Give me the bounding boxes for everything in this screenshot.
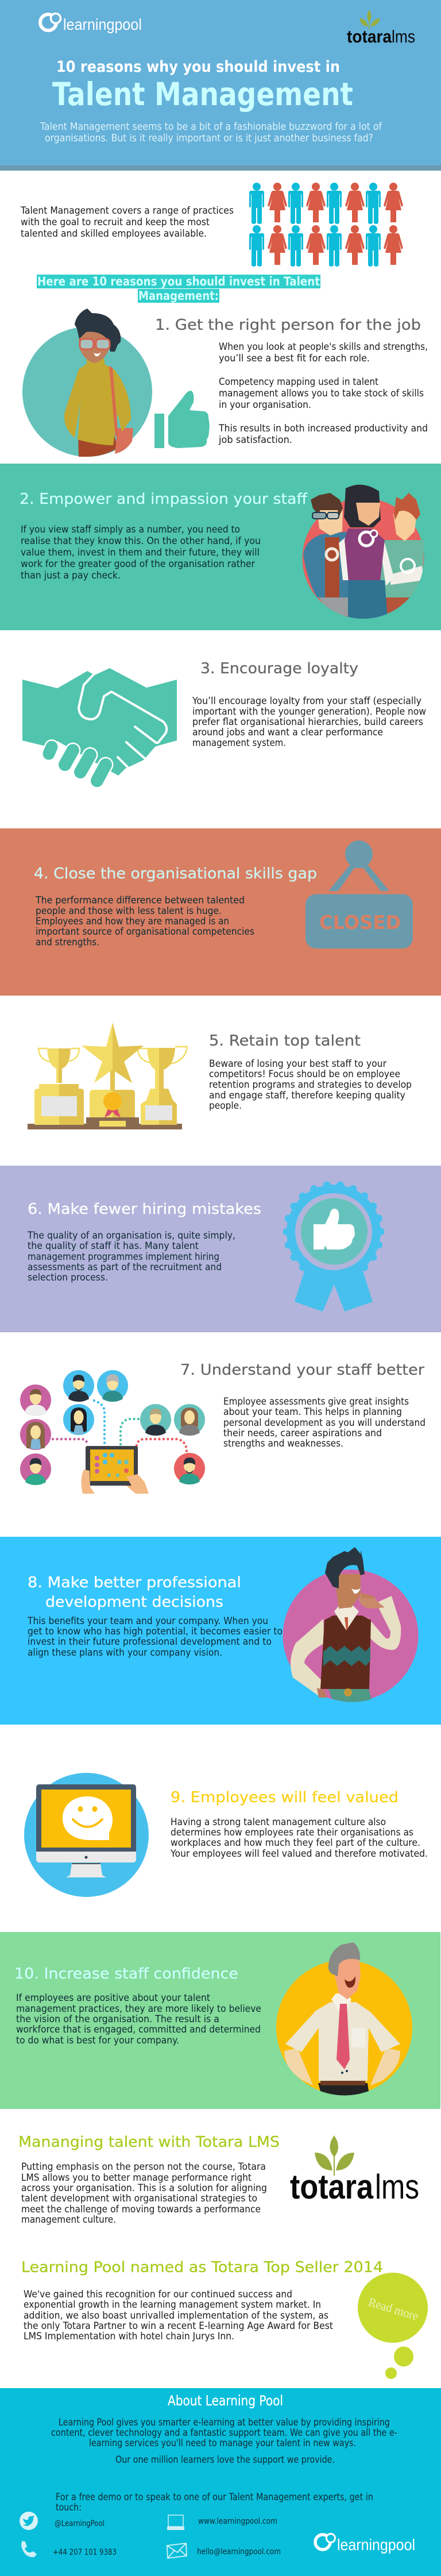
text block: reason 3: prefer flat organisational hierarchies, build careers (192, 716, 423, 727)
text block: totara: across your organisation. This is a solution for aligning (21, 2182, 267, 2193)
text block: reason 1: job satisfaction. (218, 434, 292, 445)
text block: reason 10: management practices, they are more likely to believe (16, 2003, 261, 2014)
text block: reason 8: align these plans with your company vision. (28, 1647, 222, 1658)
hands (81, 1470, 149, 1494)
illustration: staff network and tablet (20, 1370, 205, 1494)
text block: reason 1: This results in both increased productivity and (218, 423, 428, 434)
text block: reason 4: The performance difference between talented (35, 895, 245, 905)
text block: reason 3: important with the younger generation). People now (192, 706, 426, 717)
contact: website: www.learningpool.com (198, 2517, 277, 2526)
icon: closed sign (305, 840, 413, 948)
contact: phone: +44 207 101 9383 (53, 2548, 117, 2557)
text block: reason 8: get to know who has high potential, it becomes easier to (28, 1626, 283, 1637)
title line: 10 reasons why you should invest in (56, 58, 340, 76)
avatar (20, 1453, 51, 1485)
heading 7: 7. Understand your staff better (180, 1362, 424, 1379)
icon: closed sign: CLOSED (319, 911, 401, 934)
text block: reason 3: You’ll encourage loyalty from your staff (especially (192, 695, 421, 707)
heading 4: 4. Close the organisational skills gap (34, 865, 317, 882)
illustration: woman with glasses (22, 308, 152, 457)
heading 3: 3. Encourage loyalty (200, 660, 358, 677)
text block: top seller: We've gained this recognition for our continued success and (24, 2289, 292, 2300)
text block: reason 6: selection process. (28, 1272, 108, 1283)
contact: twitter (20, 2512, 105, 2530)
heading 8: development decisions (45, 1594, 223, 1611)
subheading: here are 10 reasons (37, 275, 320, 303)
logo: totara lms: totara (347, 26, 392, 47)
text block: reason 7: their needs, career aspirations and (223, 1428, 382, 1439)
heading: about: About Learning Pool (168, 2393, 283, 2409)
text block: reason 1: When you look at people's skills and strengths, (219, 341, 428, 352)
subheading: here are 10 reasons: Management: (138, 289, 219, 303)
text block: totara: LMS allows you to better manage performance right (21, 2172, 252, 2183)
text block: reason 2: If you view staff simply as a number, you need to (21, 524, 240, 535)
avatar (140, 1404, 171, 1436)
heading 5: 5. Retain top talent (209, 1032, 361, 1050)
callout: read more bubble: Read more (367, 2295, 420, 2323)
text block: reason 1: Competency mapping used in talent (219, 376, 378, 387)
text block: reason 10: the vision of the organisation. The result is a (16, 2014, 219, 2024)
text block: reason 4: people and those with less talent is huge. (36, 905, 222, 916)
text block: about: content, clever technology and a fantastic support team. We can give you all the e- (51, 2427, 397, 2438)
subheading: here are 10 reasons: Here are 10 reasons you should invest in Talent (37, 275, 320, 288)
logo: totara lms large: totara (290, 2168, 374, 2206)
panel: reason 4 (0, 828, 441, 996)
text block: reason 9: Having a strong talent management culture also (171, 1817, 386, 1827)
icon: thumbs up (154, 391, 210, 448)
logo: totara lms large (290, 2135, 419, 2206)
text block: reason 2: realise that they know this. On the other hand, if you (21, 535, 261, 546)
illustration: three colleagues (302, 485, 424, 619)
text block: reason 7: strengths and weaknesses. (223, 1438, 343, 1449)
text block: about: learning services you'll need to manage your talent in new ways. (89, 2438, 356, 2448)
text block: about: Our one million learners love the support we provide. (115, 2454, 335, 2465)
text block: top seller: the only Totara Partner to win a recent E-learning Age Award for Best (24, 2320, 333, 2331)
text block: reason 6: The quality of an organisation is, quite simply, (27, 1230, 235, 1241)
illustration: man with red tie (276, 1942, 412, 2096)
icon: rosette badge (287, 1185, 381, 1312)
text block: reason 5: retention programs and strategies to develop (209, 1079, 412, 1090)
text block: reason 4: and strengths. (36, 936, 99, 948)
panel: reason 10 (0, 1932, 440, 2109)
logo: totara lms large: lms (375, 2168, 419, 2206)
text block: reason 10: If employees are positive about your talent (16, 1992, 210, 2003)
text block: reason 10: to do what is best for your company. (16, 2035, 179, 2046)
heading 10: 10. Increase staff confidence (14, 1965, 238, 1983)
text block: reason 9 (170, 1817, 428, 1859)
text block: reason 10: workforce that is engaged, committed and determined (16, 2024, 261, 2035)
logo: totara lms (347, 10, 415, 47)
text block: top seller: exponential growth in the learning management system market. In (24, 2299, 321, 2310)
contact: email (167, 2543, 281, 2558)
text block: about: Learning Pool gives you smarter e-learning at better value by providing inspiring (59, 2417, 390, 2428)
avatar (63, 1404, 94, 1435)
logo: learningpool: learningpool (63, 16, 142, 33)
text block: reason 3: around jobs and want a clear performance (192, 727, 383, 738)
text block: reason 7: Employee assessments give great insights (223, 1396, 409, 1407)
heading 2: 2. Empower and impassion your staff (20, 491, 308, 508)
text block: reason 3: management system. (192, 738, 286, 748)
text block: reason 4 (35, 895, 254, 948)
icon: handshake (22, 668, 177, 781)
heading: managing talent: Mananging talent with Totara LMS (18, 2134, 280, 2151)
logo: learningpool footer (315, 2533, 415, 2554)
tablet (86, 1446, 138, 1486)
text block: reason 7: about your team. This helps in planning (223, 1406, 402, 1417)
text block: reason 8: invest in their future professional development and to (28, 1636, 272, 1647)
avatar (174, 1404, 205, 1436)
smiley bubble (63, 1796, 113, 1840)
heading 6: 6. Make fewer hiring mistakes (28, 1201, 261, 1218)
text block: reason 8 (27, 1615, 283, 1658)
text block: reason 9: determines how employees rate their organisations as (171, 1827, 413, 1838)
text block: top seller: LMS Implementation with hotel chain Jurys Inn. (24, 2331, 234, 2342)
text block: contact prompt: For a free demo or to speak to one of our Talent Management experts, get in (56, 2492, 373, 2502)
text block: reason 2: value them, invest in them and their future, they will (21, 547, 260, 558)
avatar (20, 1385, 51, 1416)
text block: totara: talent development with organisational strategies to (21, 2193, 257, 2204)
text block: reason 4: important source of organisational competencies (36, 926, 254, 937)
avatar (97, 1370, 128, 1402)
panel: header (0, 0, 441, 171)
avatar (63, 1370, 94, 1402)
text block: top seller: addition, we also boast unrivalled implementation of the system, as (24, 2310, 328, 2321)
icon: people rows (249, 183, 403, 267)
text block: reason 5: people. (209, 1100, 242, 1111)
panel: about learning pool (0, 2388, 441, 2576)
illustration: monitor with smiley (24, 1773, 149, 1897)
text block: reason 2: than just a pay check. (21, 570, 121, 581)
text block: reason 9: Your employees will feel valued and therefore motivated. (170, 1848, 428, 1859)
text block: reason 5: Beware of losing your best staff to your (209, 1058, 386, 1069)
text block: reason 5: competitors! Focus should be on employee (209, 1069, 400, 1079)
text block: totara (21, 2161, 267, 2225)
text block: totara: Putting emphasis on the person not the course, Totara (21, 2161, 266, 2172)
text block: reason 5 (209, 1058, 412, 1111)
contact: email: hello@learningpool.com (197, 2547, 281, 2556)
text block: reason 1: management allows you to take stock of skills (219, 388, 424, 399)
text block: about (51, 2417, 397, 2465)
heading 1: 1. Get the right person for the job (155, 317, 421, 334)
illustration: man in sweater vest (283, 1547, 418, 1702)
main title: Talent Management (52, 76, 353, 113)
heading 9: 9. Employees will feel valued (171, 1789, 399, 1806)
illustration: trophies (28, 1023, 187, 1129)
text block: reason 10 (16, 1992, 261, 2046)
logo: learningpool footer: learningpool (337, 2536, 415, 2554)
heading 8: 8. Make better professional (28, 1574, 241, 1591)
text block: totara: management culture. (21, 2214, 116, 2225)
avatar (174, 1453, 205, 1484)
text block: reason 6: assessments as part of the recruitment and (28, 1262, 222, 1272)
intro paragraph: organisations. But is it really important or is it just another business fad? (45, 133, 373, 144)
logo: learningpool (40, 14, 142, 33)
intro paragraph: Talent Management seems to be a bit of a fashionable buzzword for a lot of (40, 121, 382, 133)
panel: reason 6 (0, 1166, 441, 1332)
contact: twitter: @LearningPool (55, 2519, 105, 2528)
contact: website (167, 2515, 277, 2530)
text block: definition: with the goal to recruit and keep the most (21, 217, 210, 227)
text block: reason 1 (218, 341, 428, 445)
heading: top seller: Learning Pool named as Totara Top Seller 2014 (21, 2259, 383, 2276)
text block: definition: talented and skilled employees available. (21, 228, 207, 239)
text block: reason 7: personal development as you will understand (223, 1417, 425, 1428)
dotted connectors (53, 1401, 187, 1451)
text block: reason 5: and engage staff, therefore keeping quality (209, 1090, 405, 1101)
intro paragraph (40, 121, 382, 144)
panel: reason 8 (0, 1537, 441, 1725)
text block: top seller (24, 2289, 333, 2342)
contact: phone (21, 2541, 117, 2557)
panel: reason 2 (0, 464, 441, 630)
text block: contact prompt (56, 2492, 373, 2513)
text block: reason 2 (21, 524, 261, 581)
text block: reason 2: work for the greater good of the organisation rather (21, 558, 255, 569)
callout: read more bubble (358, 2273, 428, 2379)
text block: totara: meet the challenge of moving towards a performance (21, 2204, 261, 2215)
text block: reason 6 (27, 1230, 235, 1283)
text block: reason 7 (223, 1396, 425, 1449)
text block: definition: Talent Management covers a range of practices (20, 205, 234, 216)
text block: reason 8: This benefits your team and your company. When you (27, 1615, 268, 1626)
text block: reason 6: the quality of staff it has. Many talent (28, 1240, 199, 1251)
text block: definition (20, 205, 234, 239)
logo: totara lms: lms (392, 26, 415, 47)
text block: reason 3 (192, 695, 426, 748)
text block: reason 1: you’ll see a best fit for each role. (219, 353, 370, 364)
text block: reason 6: management programmes implement hiring (28, 1251, 219, 1262)
text block: reason 4: Employees and how they are managed is an (36, 916, 229, 927)
text block: reason 1: in your organisation. (219, 399, 311, 410)
avatar (20, 1419, 51, 1450)
heading 8 (28, 1574, 241, 1611)
text block: contact prompt: touch: (56, 2502, 82, 2513)
text block: reason 9: workplaces and how much they feel part of the culture. (171, 1837, 420, 1848)
